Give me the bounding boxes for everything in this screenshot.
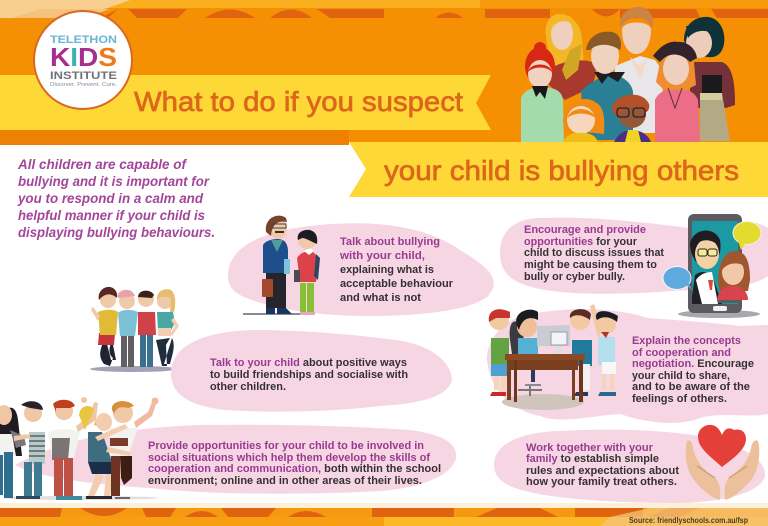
panel: explain cooperation: your child to share, — [632, 370, 730, 382]
panel: talk about bullying — [228, 223, 494, 316]
first title ribbon — [0, 75, 491, 145]
intro text: helpful manner if your child is — [18, 207, 205, 223]
second title ribbon — [349, 142, 768, 197]
panel: explain cooperation: feelings of others. — [632, 393, 727, 405]
panel: provide opportunities: environment; online and in other areas of their lives. — [148, 475, 422, 487]
logo: Discover. Prevent. Cure. — [50, 82, 117, 88]
panel: talk about bullying: acceptable behaviour — [340, 278, 454, 290]
intro text: bullying and it is important for — [18, 173, 210, 189]
panel: talk about bullying: Talk about bullying — [340, 236, 440, 248]
panel: talk to your child — [171, 330, 452, 412]
panel: work together with family: rules and expectations about — [526, 465, 679, 477]
panel: encourage and provide: bully or cyber bully. — [524, 271, 625, 283]
panel: explain cooperation: Explain the concepts — [632, 335, 741, 347]
panel: encourage and provide — [500, 218, 768, 294]
panel: provide opportunities: social situations which help them develop the skills of — [148, 452, 430, 464]
logo — [34, 11, 132, 109]
panel: explain cooperation — [487, 309, 768, 423]
intro text: you to respond in a calm and — [17, 190, 203, 206]
illustration: phone with video chat — [663, 214, 761, 318]
intro text: displaying bullying behaviours. — [18, 224, 215, 240]
source credit: Source: friendlyschools.com.au/fsp — [629, 516, 748, 525]
illustration: four friends — [90, 287, 179, 372]
panel: talk about bullying: explaining what is — [340, 264, 434, 276]
panel: talk to your child: Talk to your child about positive ways — [210, 357, 407, 369]
panel: provide opportunities: Provide opportunities for your child to be involved in — [148, 440, 424, 452]
panel: encourage and provide: child to discuss issues that — [524, 247, 664, 259]
panel: talk to your child: other children. — [210, 381, 286, 393]
footer band — [0, 503, 768, 526]
logo: TELETHON — [50, 34, 117, 46]
panel: encourage and provide: Encourage and provide — [524, 224, 646, 236]
panel: explain cooperation: and to be aware of the — [632, 381, 750, 393]
illustration: group of family and friends — [521, 7, 735, 142]
intro text: All children are capable of — [17, 156, 187, 172]
panel: work together with family: family to establish simple — [526, 453, 659, 465]
icon: heart in hands — [686, 425, 759, 500]
illustration: teacher and child — [243, 216, 320, 315]
logo: INSTITUTE — [50, 70, 117, 82]
panel: encourage and provide: opportunities for your — [524, 236, 638, 248]
panel: provide opportunities: cooperation and communication, both within the school — [148, 463, 441, 475]
panel: explain cooperation: of cooperation and — [632, 347, 731, 359]
panel: talk about bullying: and what is not — [340, 292, 421, 304]
illustration: children at a computer desk — [489, 304, 618, 410]
header orange band — [0, 0, 768, 142]
panel: encourage and provide: might be causing them to — [524, 259, 657, 271]
panel: explain cooperation: negotiation. Encourage — [632, 358, 754, 370]
illustration: group of children having fun — [0, 397, 158, 500]
title line 1: What to do if you suspect — [134, 86, 463, 117]
panel: talk about bullying: with your child, — [339, 250, 425, 262]
panel: work together with family: how your family treat others. — [526, 476, 677, 488]
logo: KIDS — [50, 42, 117, 72]
title line 2: your child is bullying others — [384, 155, 739, 186]
intro text — [17, 156, 215, 240]
panel: talk to your child: to build friendships and socialise with — [210, 369, 408, 381]
panel: work together with family — [494, 430, 765, 503]
panel: provide opportunities — [15, 425, 456, 494]
panel: work together with family: Work together with your — [526, 442, 654, 454]
